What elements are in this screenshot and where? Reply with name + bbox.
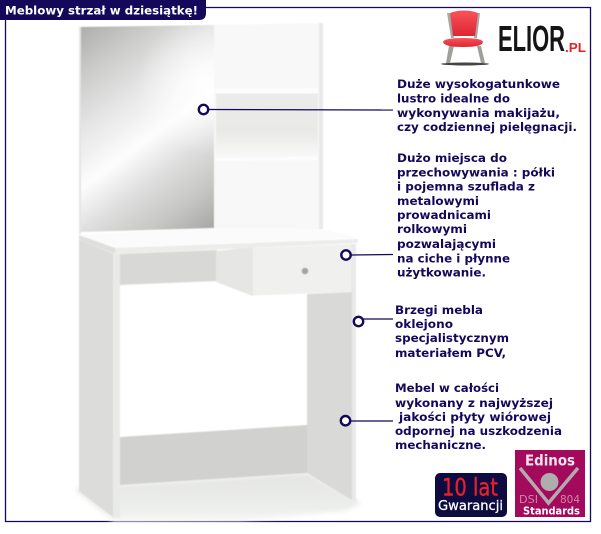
callout: storage: metalowymi (397, 194, 479, 208)
logo domain: .PL (565, 40, 586, 55)
callout: edges: specjalistycznym (395, 331, 509, 345)
callout: storage: Dużo miejsca do (397, 151, 507, 165)
desk left edge (79, 235, 115, 254)
callout: mirror: Duże wysokogatunkowe (397, 77, 560, 91)
callout: edges: Brzegi mebla (395, 303, 483, 317)
badge: Edinos standards: DSI (519, 493, 538, 506)
callout: material: jakości płyty wiórowej (398, 410, 551, 424)
callout: edges: materiałem PCV, (395, 346, 506, 360)
left side panel (79, 240, 114, 518)
back panel under desk (120, 250, 217, 285)
badge: Edinos standards: Standards (523, 506, 580, 518)
lower shelf (215, 157, 318, 161)
callout: mirror (199, 77, 577, 134)
desk top (79, 228, 358, 248)
badge: 10 year warranty (435, 473, 507, 517)
callout: storage: rolkowymi (397, 222, 467, 236)
upper shelf (215, 88, 318, 94)
callout: storage: na ciche i płynne (397, 252, 510, 266)
callout: storage: użytkowanie. (397, 266, 486, 280)
callout: mirror: wykonywania makijażu, (397, 106, 560, 120)
logo (441, 10, 586, 66)
drawer front (253, 244, 351, 296)
badge: 10 year warranty: Gwarancji (438, 499, 503, 514)
badge: 10 year warranty: 10 lat (442, 474, 498, 502)
icon: red chair (441, 10, 489, 66)
floor shadow (74, 473, 362, 522)
drawer knob (302, 268, 308, 274)
callout: material: Mebel w całości (395, 381, 499, 395)
callout: material (341, 381, 562, 452)
callout: storage: prowadnicami (397, 208, 491, 222)
right side edge (351, 244, 356, 502)
callout: material: odpornej na uszkodzenia (395, 424, 562, 438)
hutch side edge (319, 23, 323, 232)
hutch panel (214, 23, 323, 232)
callout: edges (354, 303, 509, 360)
callout: storage (341, 151, 555, 280)
mirror highlight (80, 25, 214, 232)
callout: mirror: czy codziennej pielęgnacji. (397, 120, 577, 134)
callout: mirror: lustro idealne do (397, 92, 510, 106)
lower back panel (120, 425, 307, 485)
left front edge (113, 254, 120, 518)
badge: Edinos standards: 804 (560, 493, 580, 506)
mirror edge (79, 27, 81, 234)
callout: storage: i pojemna szuflada z (397, 180, 535, 194)
title banner (0, 0, 206, 20)
middle compartment shading (216, 93, 318, 157)
drawer side (216, 247, 253, 296)
desk front edge (115, 239, 358, 254)
right leg inner side (307, 292, 356, 502)
badge: Edinos standards: Edinos (525, 452, 575, 470)
callout: storage: przechowywania : półki (397, 166, 555, 180)
mirror (80, 25, 214, 232)
callout: material: mechaniczne. (395, 438, 486, 452)
dressing table (74, 23, 362, 522)
callout: material: wykonany z najwyższej (395, 396, 553, 410)
callout: edges: oklejono (395, 317, 453, 331)
title banner: Meblowy strzał w dziesiątkę! (5, 4, 198, 18)
callout: storage: pozwalającymi (397, 237, 496, 251)
badge: Edinos standards (515, 450, 585, 518)
